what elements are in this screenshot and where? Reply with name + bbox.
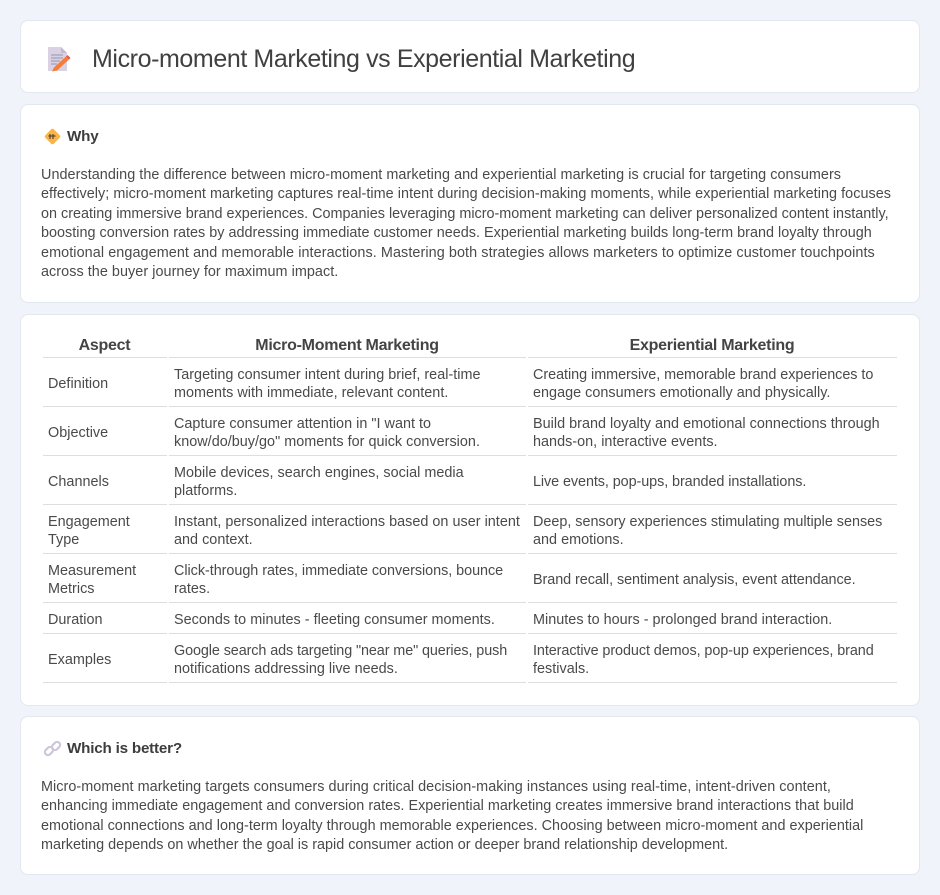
row: measurement metrics: Click-through rates, immediate conversions, bounce — [174, 563, 503, 579]
row: channels — [48, 465, 806, 499]
row: duration: Seconds to minutes - fleeting consumer moments. — [174, 612, 495, 628]
row: channels: Mobile devices, search engines, social media — [174, 465, 464, 481]
row: examples: Examples — [48, 652, 111, 668]
row: measurement metrics: rates. — [174, 581, 210, 597]
icon: warning diamond — [44, 128, 60, 144]
row: measurement metrics: Metrics — [48, 581, 95, 597]
row: engagement type: and context. — [174, 532, 253, 548]
row: duration — [48, 612, 832, 628]
row: measurement metrics: Brand recall, sentiment analysis, event attendance. — [533, 572, 856, 588]
text block: why: Understanding the difference between micro-moment marketing and experiential marketing is crucial for targeting consumers — [41, 167, 841, 183]
row: examples: notifications addressing live needs. — [174, 661, 398, 677]
row: engagement type — [48, 514, 882, 548]
text block: which is better: enhancing immediate engagement and conversion rates. Experiential marketing creates immersive brand interactions that build — [41, 798, 854, 814]
row: engagement type: Deep, sensory experiences stimulating multiple senses — [533, 514, 882, 530]
text block: which is better — [41, 779, 863, 853]
text block: which is better: emotional connections and long-term loyalty through memorable experiences. Choosing between micro-moment and experiential — [41, 818, 863, 834]
row: definition: Targeting consumer intent during brief, real-time — [174, 367, 481, 383]
row: objective: Objective — [48, 425, 108, 441]
text block: which is better: marketing depends on whether the goal is rapid consumer action or deeper brand relationship development. — [41, 837, 728, 853]
row: objective: hands-on, interactive events. — [533, 434, 718, 450]
row: measurement metrics — [48, 563, 856, 597]
table header: Experiential Marketing — [630, 337, 794, 354]
row: engagement type: and emotions. — [533, 532, 624, 548]
row: channels: Channels — [48, 474, 109, 490]
row: engagement type: Type — [48, 532, 79, 548]
text block: which is better: Micro-moment marketing targets consumers during critical decision-making instances using real-time, intent-driven content, — [41, 779, 831, 795]
text block: why: emotional engagement and memorable interactions. Mastering both strategies allows marketers to optimize customer touchpoints — [41, 245, 875, 261]
panel: why — [20, 104, 920, 303]
row: objective: Build brand loyalty and emotional connections through — [533, 416, 880, 432]
text block: why: across the buyer journey for maximum impact. — [41, 264, 338, 280]
text block: why: on creating immersive brand experiences. Companies leveraging micro-moment marketing can deliver personalized content instantly, — [41, 206, 889, 222]
panel: which is better — [20, 716, 920, 875]
row: channels: Live events, pop-ups, branded installations. — [533, 474, 806, 490]
table header: Aspect — [79, 337, 130, 354]
row: definition: Definition — [48, 376, 108, 392]
icon: link — [44, 740, 62, 756]
table header: Micro-Moment Marketing — [255, 337, 439, 354]
text block: why: effectively; micro-moment marketing captures real-time intent during decision-making moments, while experiential marketing focuses — [41, 186, 891, 202]
row: engagement type: Instant, personalized interactions based on user intent — [174, 514, 520, 530]
row: examples — [48, 643, 874, 677]
row: definition: Creating immersive, memorable brand experiences to — [533, 367, 873, 383]
text block: why: boosting conversion rates by addressing immediate customer needs. Experiential marketing builds long-term brand loyalty through — [41, 225, 872, 241]
row: definition: engage consumers emotionally and physically. — [533, 385, 830, 401]
row: examples: Interactive product demos, pop-up experiences, brand — [533, 643, 874, 659]
row: duration: Minutes to hours - prolonged brand interaction. — [533, 612, 832, 628]
row: duration: Duration — [48, 612, 103, 628]
row: channels: platforms. — [174, 483, 237, 499]
table header — [79, 337, 794, 354]
row: definition — [48, 367, 873, 401]
title: Micro-moment Marketing vs Experiential Marketing — [92, 45, 635, 73]
heading: why: Why — [67, 128, 98, 145]
heading: which is better: Which is better? — [67, 740, 182, 757]
row: objective: Capture consumer attention in "I want to — [174, 416, 431, 432]
row: examples: Google search ads targeting "near me" queries, push — [174, 643, 507, 659]
panel: header — [20, 20, 920, 93]
row: measurement metrics: Measurement — [48, 563, 136, 579]
panel: comparison table — [20, 314, 920, 706]
icon: document with pencil — [48, 47, 70, 72]
row: examples: festivals. — [533, 661, 589, 677]
row: objective — [48, 416, 880, 450]
row: engagement type: Engagement — [48, 514, 130, 530]
row: objective: know/do/buy/go" moments for quick conversion. — [174, 434, 480, 450]
text block: why — [41, 167, 891, 280]
row: definition: moments with immediate, relevant content. — [174, 385, 448, 401]
